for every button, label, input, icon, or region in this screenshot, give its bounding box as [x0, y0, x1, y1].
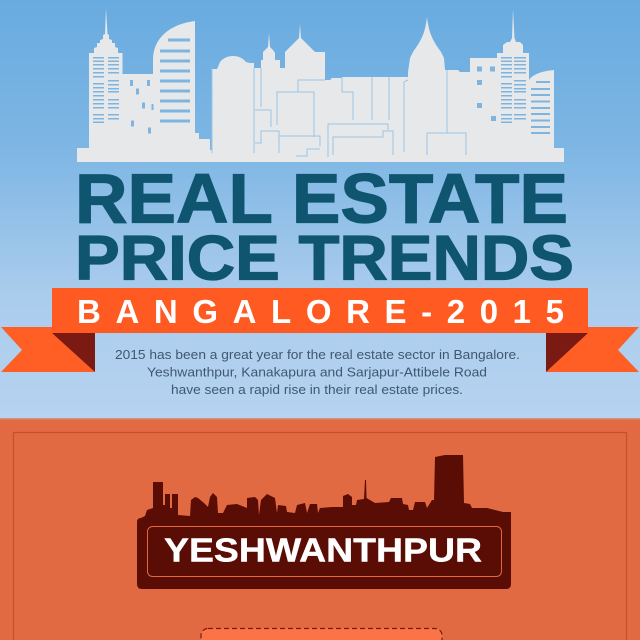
- badge label: YESHWANTHPUR: [164, 532, 482, 568]
- scattered windows left: [130, 80, 154, 134]
- building outlines: [212, 68, 466, 157]
- badge inner outline: [148, 526, 502, 576]
- location badge with skyline: [137, 455, 511, 589]
- title: REAL ESTATE: [75, 160, 568, 238]
- tower windows left: [93, 57, 119, 123]
- ribbon left tail: [1, 327, 95, 372]
- ribbon right tail: [546, 327, 639, 372]
- right tower windows: [501, 57, 526, 123]
- intro paragraph: Yeshwanthpur, Kanakapura and Sarjapur-Attibele Road: [147, 366, 487, 380]
- panel: Yeshwanthpur: [0, 418, 640, 640]
- ribbon body: [52, 288, 588, 333]
- badge silhouette: [137, 455, 511, 589]
- ribbon left fold: [52, 333, 95, 372]
- intro paragraph: 2015 has been a great year for the real estate sector in Bangalore.: [115, 348, 520, 362]
- ribbon banner: [1, 288, 639, 372]
- dashed info box: [201, 628, 442, 640]
- ribbon text: BANGALORE-2015: [77, 293, 564, 330]
- title: [75, 160, 574, 294]
- panel inner border: [14, 432, 626, 640]
- title: PRICE TRENDS: [75, 224, 574, 294]
- scattered windows right: [477, 66, 496, 121]
- curved building windows left: [160, 38, 190, 122]
- intro paragraph: have seen a rapid rise in their real estate prices.: [171, 383, 463, 397]
- ribbon right fold: [546, 333, 588, 372]
- skyline silhouette: [77, 8, 564, 162]
- intro paragraph: [115, 348, 520, 397]
- right curved building windows: [531, 81, 550, 134]
- sky background: [0, 0, 640, 419]
- illustration: city skyline: [77, 8, 564, 162]
- panel background: [0, 419, 640, 640]
